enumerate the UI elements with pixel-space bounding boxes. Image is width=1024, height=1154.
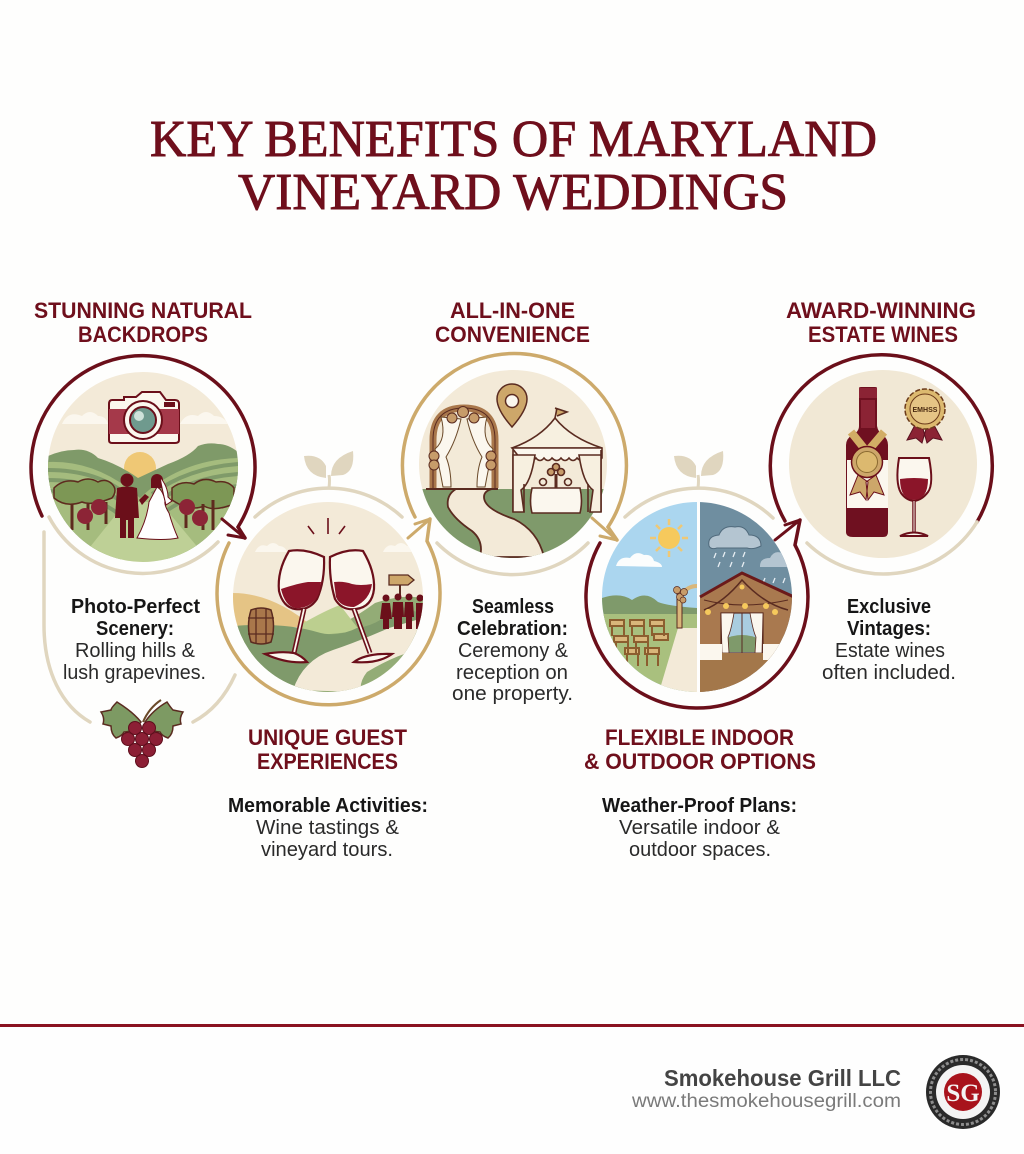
text block: photo-perfect scenery: Scenery:: [96, 618, 174, 640]
icon: company logo: SG: [946, 1080, 980, 1107]
panel: unique guest experiences: [217, 451, 440, 861]
icon: sunny outdoor half: [602, 502, 697, 694]
icon: sprout: [674, 451, 723, 488]
footer website: www.thesmokehousegrill.com: [631, 1091, 901, 1112]
text block: seamless celebration: [452, 596, 573, 705]
icon: guests and signpost: [380, 575, 424, 629]
icon: grapes: [101, 700, 183, 768]
heading: unique guest experiences: [248, 725, 408, 774]
footer company name: Smokehouse Grill LLC: [664, 1065, 901, 1091]
heading: flexible indoor and outdoor options: & OUTDOOR OPTIONS: [584, 749, 816, 774]
heading: flexible indoor and outdoor options: [584, 725, 816, 774]
text block: weather-proof plans: [602, 795, 797, 861]
ring with arrow: [31, 356, 255, 722]
text block: exclusive vintages: often included.: [822, 662, 956, 684]
icon: ceremony and reception scene: [418, 370, 608, 564]
icon: floral arch: [426, 406, 498, 489]
illustration background: [789, 370, 977, 558]
title: KEY BENEFITS OF MARYLAND: [150, 111, 877, 168]
icon: award rosette: [905, 389, 945, 443]
heading: all-in-one convenience: ALL-IN-ONE: [450, 298, 575, 323]
text block: weather-proof plans: Weather-Proof Plans:: [602, 795, 797, 817]
panel: all-in-one convenience: [402, 298, 626, 705]
heading: award-winning estate wines: AWARD-WINNING: [786, 298, 976, 323]
panel: stunning natural backdrops: [31, 298, 255, 768]
text block: memorable activities: Memorable Activities:: [228, 795, 428, 817]
ring with arrow: [217, 488, 440, 705]
text block: seamless celebration: one property.: [452, 683, 573, 705]
text block: photo-perfect scenery: lush grapevines.: [63, 662, 206, 684]
text block: memorable activities: vineyard tours.: [261, 839, 393, 861]
heading: award-winning estate wines: [786, 298, 976, 347]
icon: award rosette: EMHSS: [912, 407, 938, 414]
heading: unique guest experiences: UNIQUE GUEST: [248, 725, 408, 750]
icon: glass of red wine: [897, 458, 931, 536]
text block: memorable activities: [228, 795, 428, 861]
heading: stunning natural backdrops: BACKDROPS: [78, 322, 208, 347]
text block: photo-perfect scenery: Rolling hills &: [75, 640, 196, 662]
icon: sprout: [304, 451, 353, 488]
text block: weather-proof plans: Versatile indoor &: [619, 817, 781, 839]
text block: seamless celebration: reception on: [456, 662, 568, 684]
icon: map pin: [497, 384, 527, 427]
heading: stunning natural backdrops: [34, 298, 252, 347]
ring with arrow: [402, 353, 626, 575]
icon: wine glasses: [265, 518, 392, 662]
text block: seamless celebration: Celebration:: [457, 618, 568, 640]
text block: photo-perfect scenery: Photo-Perfect: [71, 596, 200, 618]
text block: memorable activities: Wine tastings &: [256, 817, 400, 839]
heading: all-in-one convenience: [435, 298, 590, 347]
icon: vineyard couple scene: [48, 372, 238, 562]
icon: wine bottle with medal: [846, 387, 888, 537]
panel: flexible indoor and outdoor options: [584, 451, 816, 861]
text block: seamless celebration: Seamless: [472, 596, 554, 618]
title: VINEYARD WEDDINGS: [238, 164, 788, 221]
footer: [0, 1024, 1024, 1154]
text block: weather-proof plans: outdoor spaces.: [629, 839, 771, 861]
ring with arrow: [770, 355, 992, 574]
icon: tent with table: [512, 408, 602, 513]
heading: flexible indoor and outdoor options: FLEXIBLE INDOOR: [605, 725, 794, 750]
text block: exclusive vintages: Exclusive: [847, 596, 931, 618]
heading: stunning natural backdrops: STUNNING NATURAL: [34, 298, 252, 323]
icon: clinking glasses scene: [233, 502, 425, 694]
title: [150, 111, 877, 221]
icon: camera: [109, 392, 179, 443]
icon: rainy barn half: [700, 502, 795, 693]
text block: exclusive vintages: [822, 596, 956, 684]
icon: company logo: [926, 1055, 1000, 1129]
text block: exclusive vintages: Vintages:: [847, 618, 931, 640]
text block: photo-perfect scenery: [63, 596, 206, 684]
text block: exclusive vintages: Estate wines: [835, 640, 945, 662]
heading: award-winning estate wines: ESTATE WINES: [808, 322, 958, 347]
icon: wine barrel: [248, 608, 274, 644]
ring with arrow: [586, 488, 808, 708]
heading: all-in-one convenience: CONVENIENCE: [435, 322, 590, 347]
heading: unique guest experiences: EXPERIENCES: [257, 749, 398, 774]
text block: seamless celebration: Ceremony &: [458, 640, 569, 662]
panel: award-winning estate wines: [770, 298, 992, 684]
